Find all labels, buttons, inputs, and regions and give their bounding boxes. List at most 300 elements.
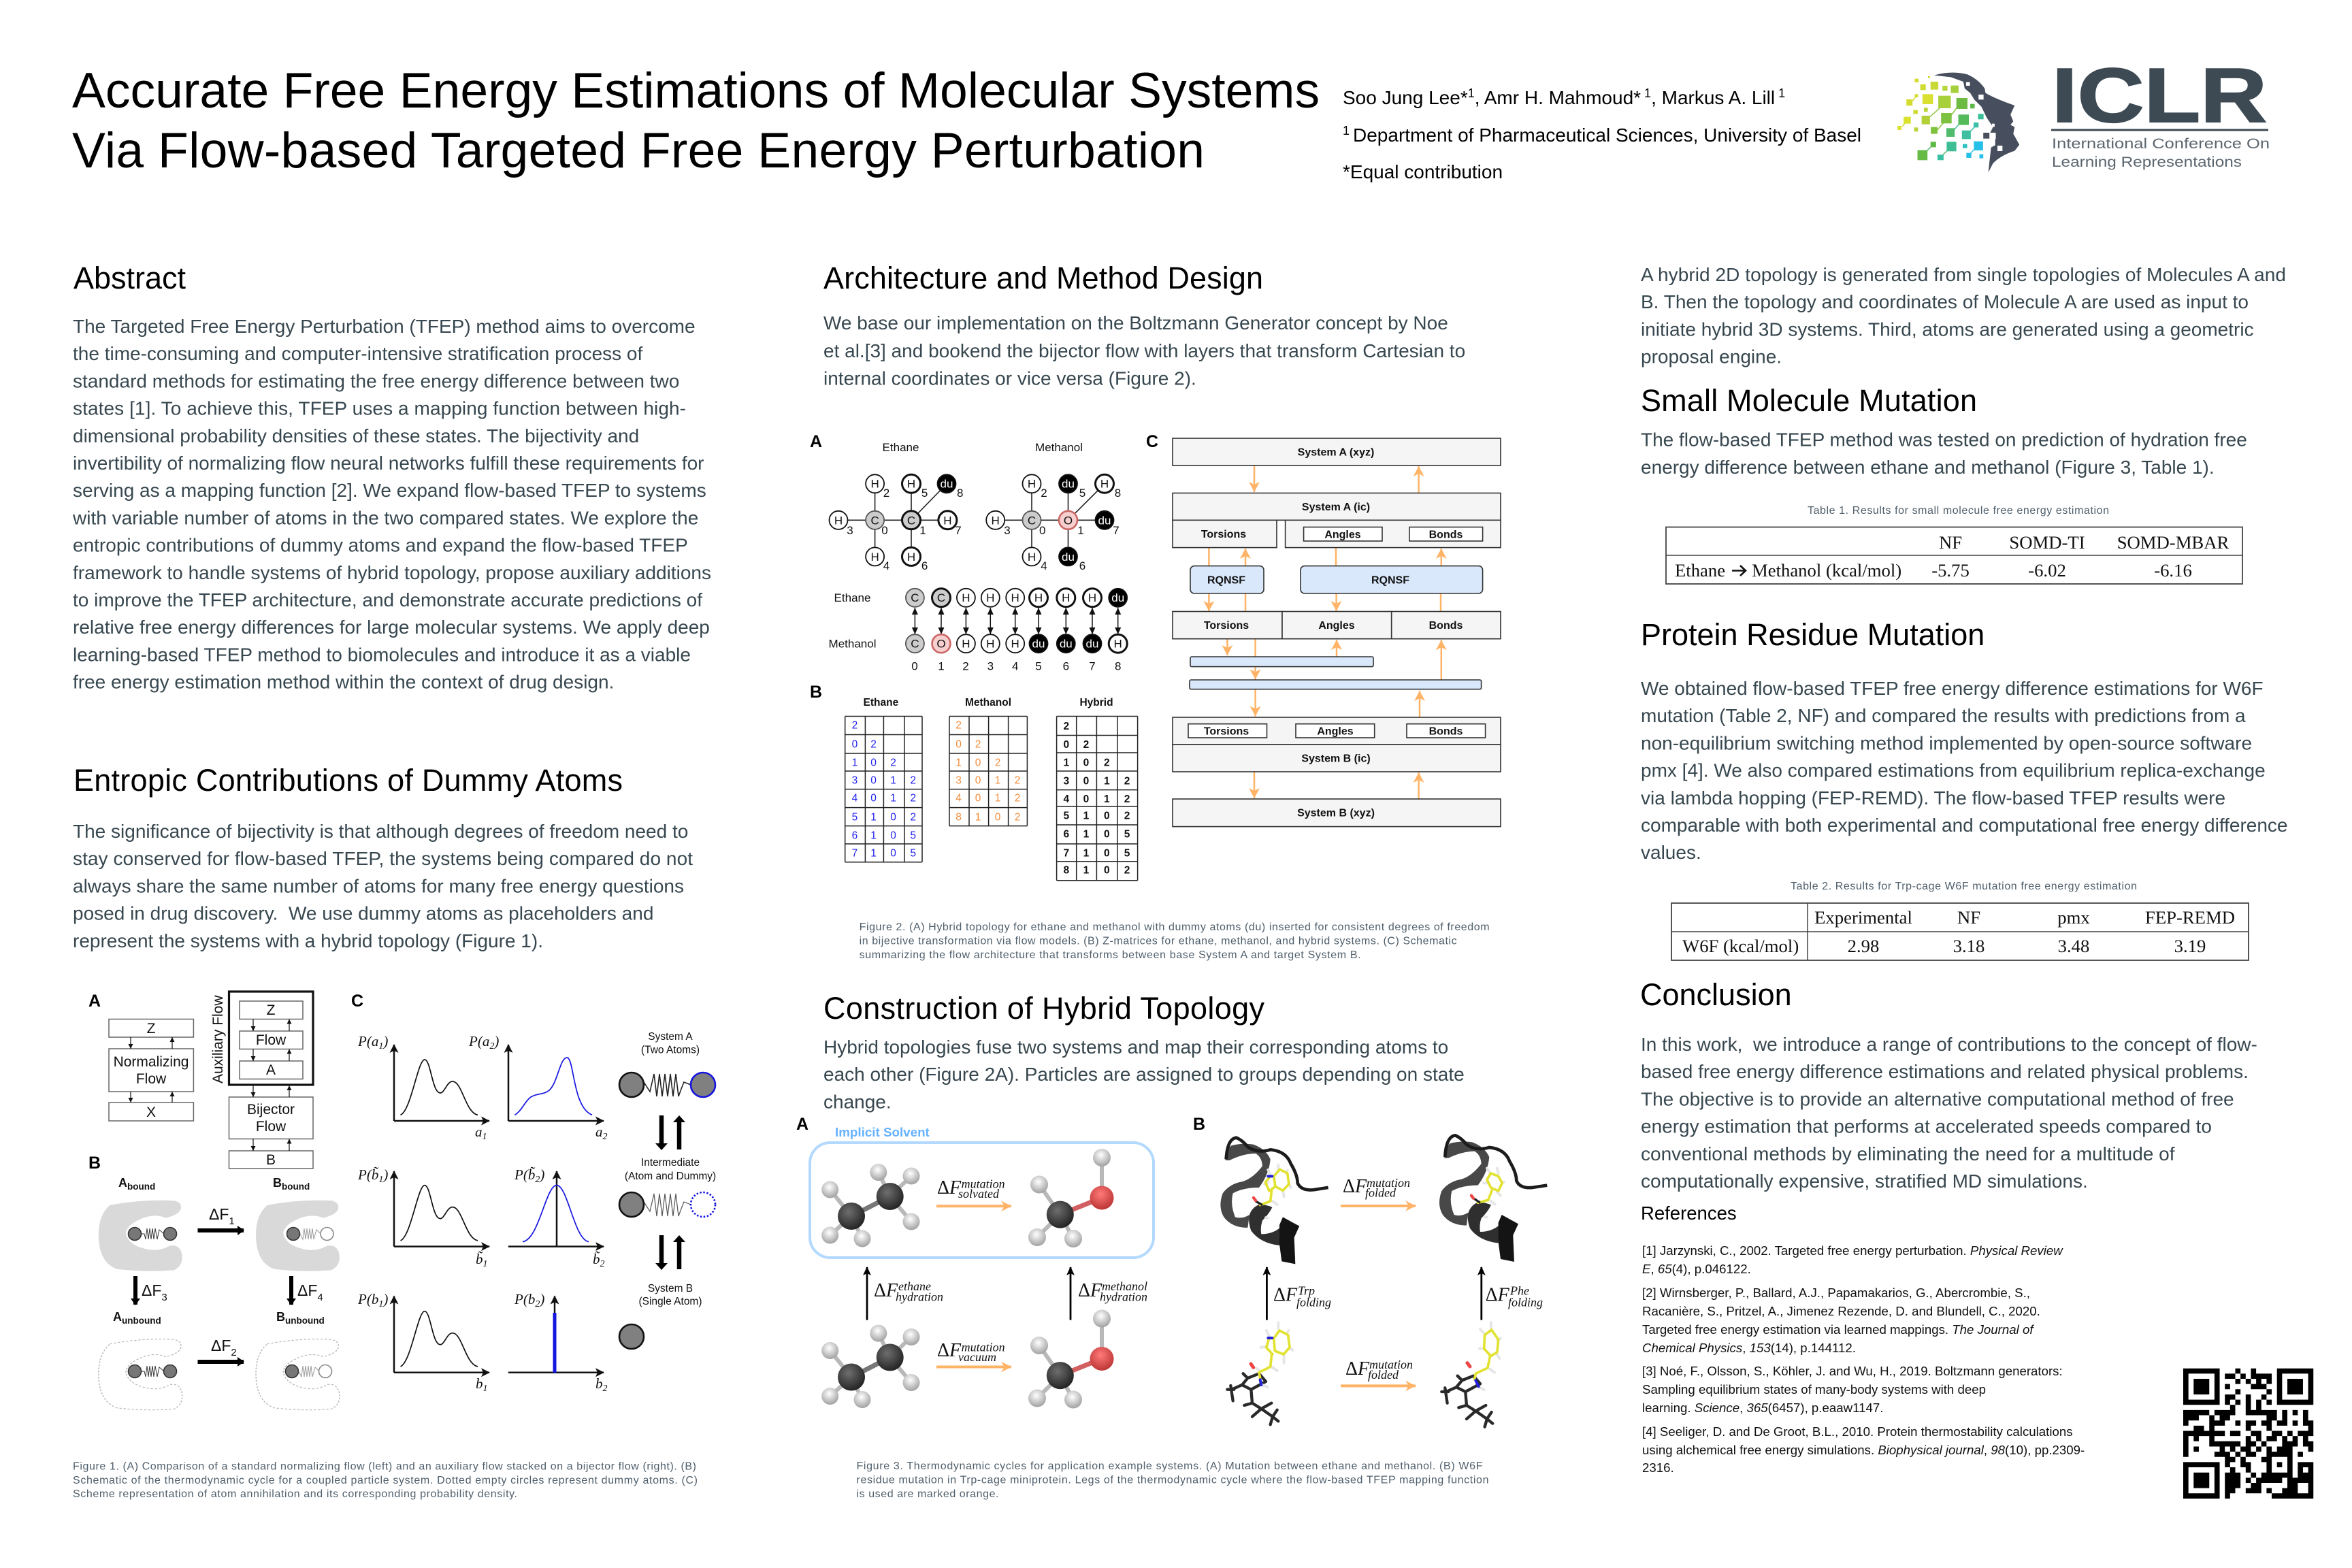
text block: protein residue body: comparable with both experimental and computational free energy difference: [1641, 815, 2288, 836]
free energy labels B: [1273, 1176, 1543, 1382]
authors and affiliations: , Amr H. Mahmoud*: [1475, 87, 1641, 108]
atom annihilation scheme: System B: [648, 1283, 693, 1294]
plot row b tilde: 1: [378, 1175, 383, 1185]
ethane molecule: H: [943, 514, 952, 527]
heading: abstract: Abstract: [74, 261, 186, 295]
free energy labels A: [874, 1177, 1147, 1364]
ethane z-matrix: 6105: [852, 830, 916, 841]
text block: small molecule body: energy difference between ethane and methanol (Figure 3, Table 1).: [1641, 457, 2215, 478]
free energy labels A: ΔF: [937, 1340, 962, 1361]
ethane molecule: H: [907, 551, 915, 564]
panel: small molecule mutation: [1641, 383, 2247, 584]
free energy labels B: ΔF: [1273, 1285, 1298, 1306]
particles unbound B: [286, 1365, 332, 1377]
figure 2: [810, 432, 1501, 961]
plot row b: ): [382, 1291, 388, 1307]
plot row a: 1: [378, 1041, 383, 1051]
text block: conclusion body: based free energy difference estimations and related physical problems.: [1641, 1061, 2249, 1082]
protein Phe folded: [1439, 1135, 1547, 1262]
atom annihilation scheme: Intermediate: [641, 1157, 700, 1169]
figure 1 panel A: flow stacks: A: [266, 1062, 276, 1078]
plot row b tilde: 2: [600, 1259, 604, 1269]
table 2: pmx: [2057, 907, 2090, 928]
figure 3 caption: residue mutation in Trp-cage miniprotein. Legs of the thermodynamic cycle where the flow-based TFEP mapping function: [856, 1474, 1489, 1486]
figure 2 panel B: z-matrices: Ethane: [864, 697, 899, 708]
text block: protein residue body: non-equilibrium switching method implemented by open-source software: [1641, 732, 2252, 753]
plot row b tilde: P(b̃: [358, 1166, 378, 1183]
RQNSF blocks: [1190, 566, 1483, 593]
text block: architecture body: internal coordinates or vice versa (Figure 2).: [823, 368, 1196, 389]
text block: reference list: Sampling equilibrium states of many-body systems with deep: [1642, 1382, 1986, 1396]
authors and affiliations: Soo Jung Lee*: [1343, 87, 1468, 108]
free energy labels B: ΔF: [1343, 1176, 1367, 1197]
ICLR wordmark: ICLR: [2052, 52, 2267, 138]
vacuum ethane: [821, 1325, 920, 1408]
figure 2 panel C: flow architecture: C: [1146, 432, 1158, 451]
methanol z-matrix: 102: [956, 757, 1000, 769]
split row: [1173, 611, 1501, 639]
methanol molecule: 1: [1077, 524, 1084, 537]
table 2: 3.18: [1953, 936, 1984, 956]
vacuum methanol: [1028, 1309, 1113, 1409]
methanol z-matrix: 2: [956, 720, 962, 731]
text block: protein residue body: pmx [4]. We also compared estimations from equilibrium replica-exchange: [1641, 760, 2266, 781]
unfolded Phe peptide: [1441, 1322, 1501, 1427]
table 1: Ethane: [1675, 560, 1725, 581]
plot row a: P(a: [358, 1033, 378, 1049]
panel: references: [1641, 1203, 2085, 1475]
plot row b tilde: ): [539, 1166, 544, 1183]
free energy labels B: mutation: [1367, 1176, 1410, 1190]
heading: protein residue mutation: Protein Residue Mutation: [1641, 617, 1984, 652]
text block: protein residue body: via lambda hopping (FEP-REMD). The flow-based TFEP results were: [1641, 787, 2225, 808]
system B boxes: Bonds: [1429, 725, 1463, 738]
plot row a: ): [493, 1033, 499, 1049]
table 1: (kcal/mol): [1826, 560, 1901, 581]
figure 1 panel B: thermodynamic cycle: unbound: [285, 1316, 325, 1326]
atom mapping row: H: [1011, 637, 1019, 651]
figure 1 panel A: flow stacks: Bijector: [247, 1102, 295, 1117]
hybrid z-matrix: [1057, 716, 1138, 881]
ethane molecule: 5: [921, 487, 928, 500]
ethane molecule: C: [907, 514, 915, 527]
icon: table arrow: [1732, 566, 1746, 576]
authors and affiliations: [1343, 86, 1861, 182]
system B boxes: System B (ic): [1301, 753, 1371, 765]
ethane molecule: H: [834, 514, 843, 527]
methanol molecule: 6: [1079, 559, 1085, 572]
text block: small molecule body: [1641, 429, 2247, 478]
protein Trp folded: [1220, 1138, 1328, 1264]
plot row b: 1: [378, 1299, 383, 1309]
authors and affiliations: *Equal contribution: [1343, 161, 1503, 182]
text block: architecture body: We base our implementation on the Boltzmann Generator concept by Noe: [823, 312, 1448, 333]
text block: hybrid 2D topology continued: B. Then the topology and coordinates of Molecule A are used as input to: [1641, 291, 2249, 312]
free energy labels A: ethane: [898, 1279, 931, 1293]
table 1: NF: [1939, 532, 1962, 553]
figure 3 panel B: W6F cycle: [1193, 1115, 1547, 1427]
text block: conclusion body: In this work, we introduce a range of contributions to the concept of flow-: [1641, 1034, 2257, 1055]
hybrid z-matrix: 3012: [1063, 776, 1130, 787]
plot row b: b: [476, 1375, 483, 1392]
plot row b tilde: 2: [535, 1175, 540, 1185]
atom mapping row: du: [1032, 637, 1045, 651]
system A boxes: System A (xyz): [1298, 446, 1374, 459]
figure 1 panel A: flow stacks: A: [88, 992, 101, 1011]
ethane molecule: H: [870, 478, 879, 490]
text block: conclusion body: computationally expensive, stratified MD simulations.: [1641, 1171, 2088, 1192]
figure 1 panel A: flow stacks: Auxiliary Flow: [210, 995, 226, 1083]
title: [72, 63, 1320, 178]
free energy labels B: folding: [1508, 1296, 1543, 1309]
text block: reference list: [2] Wirnsberger, P., Ballard, A.J., Papamakarios, G., Abercrombie, S.,: [1642, 1286, 2030, 1300]
free energy labels A: ΔF: [1078, 1280, 1102, 1301]
free energy labels A: ΔF: [874, 1280, 898, 1301]
methanol molecule: du: [1062, 478, 1075, 490]
text block: abstract body: invertibility of normalizing flow neural networks fulfill these requirements for: [73, 453, 704, 474]
atom mapping row: C: [937, 591, 945, 604]
text block: abstract body: the time-consuming and computer-intensive stratification process of: [73, 343, 642, 364]
table 1: SOMD-TI: [2009, 532, 2085, 553]
system B boxes: Torsions: [1204, 725, 1249, 738]
figure 2 panel A: hybrid topology: A: [810, 432, 822, 451]
atom annihilation scheme: (Single Atom): [638, 1296, 702, 1307]
figure 2 caption: [860, 921, 1490, 961]
heading: architecture: Architecture and Method Design: [823, 261, 1263, 295]
atom mapping row: 7: [1089, 660, 1096, 672]
system B boxes: System B (xyz): [1297, 807, 1375, 819]
text block: reference list: [1642, 1243, 2085, 1475]
figure 1 panel B: thermodynamic cycle: bound: [127, 1181, 155, 1192]
atom mapping row: 1: [938, 660, 945, 672]
panel: construction of hybrid topology: [823, 991, 1465, 1112]
text block: reference list: Targeted free energy estimation via learned mappings. The Journal of: [1642, 1322, 2034, 1337]
text block: hybrid 2D topology continued: A hybrid 2D topology is generated from single topologies of Molecules A and: [1641, 264, 2286, 285]
atom annihilation scheme: (Atom and Dummy): [625, 1171, 716, 1182]
table 2: NF: [1957, 907, 1980, 928]
text block: abstract body: relative free energy differences for large molecular systems. We apply deep: [73, 617, 710, 638]
text block: hybrid topology body: change.: [823, 1091, 892, 1112]
atom annihilation scheme: System A: [648, 1031, 693, 1043]
figure 3 caption: Figure 3. Thermodynamic cycles for application example systems. (A) Mutation between ethane and methanol. (B) W6F: [856, 1460, 1483, 1472]
methanol molecule: 8: [1115, 487, 1121, 500]
methanol z-matrix: 8102: [956, 811, 1020, 823]
text block: small molecule body: The flow-based TFEP method was tested on prediction of hydration free: [1641, 429, 2247, 451]
arrows A: [867, 1206, 1071, 1367]
ethane molecule: [829, 474, 963, 572]
figure 1 panel B: thermodynamic cycle: B: [88, 1154, 101, 1173]
blue bars: [1190, 657, 1482, 689]
text block: reference list: [4] Seeliger, D. and De Groot, B.L., 2010. Protein thermostability calculations: [1642, 1424, 2073, 1439]
authors and affiliations: 1: [1468, 86, 1475, 100]
figure 1 panel B: thermodynamic cycle: A: [118, 1176, 127, 1190]
solvated ethane: [821, 1164, 920, 1247]
text block: abstract body: serving as a mapping function [2]. We expand flow-based TFEP to systems: [73, 480, 706, 501]
figure 1 caption: Scheme representation of atom annihilation and its corresponding probability density.: [73, 1488, 517, 1500]
free energy labels B: ΔF: [1345, 1358, 1370, 1379]
ethane molecule: 1: [919, 524, 926, 537]
text block: abstract body: learning-based TFEP method to biomolecules and introduce it as a viable: [73, 644, 691, 665]
text block: conclusion body: [1641, 1034, 2257, 1192]
atom mapping row: du: [1111, 591, 1124, 604]
atom mapping row: H: [962, 591, 970, 604]
ethane z-matrix: 7105: [852, 848, 916, 859]
plot row b: [357, 1291, 607, 1394]
plot row b: P(b: [514, 1291, 535, 1307]
authors and affiliations: , Markus A. Lill: [1651, 87, 1775, 108]
system A boxes: Torsions: [1201, 529, 1246, 540]
unfolded Trp peptide: [1227, 1322, 1292, 1424]
figure 1 panel A: flow stacks: B: [266, 1152, 276, 1168]
figure 1 panel A: flow stacks: Normalizing: [114, 1054, 189, 1070]
table 2: 3.19: [2174, 936, 2206, 956]
figure 1 panel B: thermodynamic cycle: ΔF: [142, 1281, 161, 1299]
methanol molecule: 2: [1041, 487, 1047, 500]
methanol molecule: H: [992, 514, 1000, 527]
atom mapping row: H: [1034, 591, 1043, 604]
system A boxes: Bonds: [1429, 529, 1463, 540]
figure 3 caption: [856, 1460, 1489, 1500]
plot row a: a: [595, 1124, 603, 1140]
plot row b: 2: [535, 1299, 540, 1309]
figure 3 caption: is used are marked orange.: [856, 1488, 999, 1500]
authors and affiliations: 1: [1775, 86, 1785, 100]
free energy labels B: ΔF: [1486, 1285, 1510, 1306]
hybrid z-matrix: 6105: [1063, 829, 1130, 840]
ethane molecule: du: [941, 478, 953, 490]
plot row b tilde: 1: [483, 1259, 487, 1269]
figure 1 panel B: thermodynamic cycle: 4: [317, 1292, 323, 1303]
figure 3 panel A: ethane to methanol cycle: Implicit Solvent: [835, 1125, 930, 1139]
plot row a: 1: [482, 1132, 487, 1142]
figure 1 panel A: flow stacks: X: [146, 1105, 156, 1120]
atom mapping row: 3: [987, 660, 994, 672]
free energy labels A: solvated: [958, 1187, 1000, 1200]
plot row b tilde: [357, 1166, 604, 1269]
authors and affiliations: Department of Pharmaceutical Sciences, University of Basel: [1353, 125, 1861, 146]
text block: reference list: using alchemical free energy simulations. Biophysical journal, 98(10), pp.2309-: [1642, 1443, 2085, 1457]
text block: architecture body: et al.[3] and bookend the bijector flow with layers that transform Cartesian to: [823, 340, 1465, 361]
methanol molecule: du: [1062, 551, 1075, 564]
ethane molecule: H: [870, 551, 879, 564]
ethane molecule: H: [907, 478, 915, 490]
text block: abstract body: framework to handle systems of hybrid topology, propose auxiliary additions: [73, 562, 711, 583]
authors and affiliations: 1: [1641, 86, 1651, 100]
particles unbound A: [128, 1365, 177, 1377]
text block: protein residue body: mutation (Table 2, NF) and compared the results with predictions from a: [1641, 705, 2246, 726]
methanol molecule: 0: [1039, 524, 1045, 537]
text block: abstract body: states [1]. To achieve this, TFEP uses a mapping function between high-: [73, 398, 686, 419]
free energy labels B: folded: [1368, 1368, 1399, 1382]
figure 2 panel B: z-matrices: Methanol: [965, 697, 1011, 708]
text block: conclusion body: The objective is to provide an alternative computational method of free: [1641, 1088, 2234, 1109]
plot row b: b: [595, 1375, 603, 1392]
system A boxes: Angles: [1324, 529, 1361, 540]
atom mapping row: 8: [1115, 660, 1121, 672]
table 2: W6F (kcal/mol): [1682, 936, 1799, 956]
atom mapping row: H: [1062, 591, 1070, 604]
text block: abstract body: dimensional probability densities of these states. The bijectivity and: [73, 425, 639, 446]
split row: Bonds: [1429, 620, 1463, 632]
ICLR wordmark: [2051, 52, 2270, 170]
text block: abstract body: standard methods for estimating the free energy difference between two: [73, 370, 679, 391]
ethane z-matrix: 5102: [852, 811, 916, 823]
atom mapping row: H: [1088, 591, 1096, 604]
methanol molecule: 5: [1079, 487, 1085, 500]
atom mapping row: [829, 589, 1127, 672]
plot row a: P(a: [469, 1033, 489, 1049]
figure 1 panel A: flow stacks: Z: [147, 1021, 156, 1036]
table 1: SOMD-MBAR: [2117, 532, 2230, 553]
hybrid z-matrix: 7105: [1063, 848, 1130, 859]
text block: hybrid 2D topology continued: initiate hybrid 3D systems. Third, atoms are generated using a geometric: [1641, 318, 2254, 340]
text block: protein residue body: [1641, 678, 2288, 863]
text block: reference list: [1] Jarzynski, C., 2002. Targeted free energy perturbation. Physical Review: [1642, 1243, 2063, 1258]
text block: entropic body: The significance of bijectivity is that although degrees of freedom need to: [73, 821, 688, 842]
heading: small molecule mutation: Small Molecule Mutation: [1641, 383, 1977, 418]
figure 1 panel B: thermodynamic cycle: 2: [231, 1347, 237, 1358]
methanol molecule: C: [1028, 514, 1036, 527]
text block: abstract body: entropic contributions of dummy atoms and expand the flow-based TFEP: [73, 535, 688, 556]
figure 3 panel A: ethane to methanol cycle: A: [796, 1115, 808, 1134]
ethane z-matrix: [845, 716, 922, 862]
figure 2 caption: Figure 2. (A) Hybrid topology for ethane and methanol with dummy atoms (du) inserted for consistent degrees of freedom: [860, 921, 1490, 933]
atom mapping row: 5: [1035, 660, 1042, 672]
figure 2 caption: summarizing the flow architecture that transforms between base System A and target System B.: [860, 949, 1361, 961]
atom mapping row: 0: [911, 660, 918, 672]
figure 1 panel C: probability density plots: [351, 992, 716, 1394]
figure 1 panel B: thermodynamic cycle: A: [113, 1310, 122, 1324]
table 1: -6.16: [2154, 560, 2192, 581]
figure 3: [796, 1115, 1547, 1500]
methanol z-matrix: 3012: [956, 774, 1020, 787]
plot row a: a: [475, 1124, 482, 1140]
free energy labels B: mutation: [1369, 1358, 1413, 1371]
free energy labels A: hydration: [896, 1290, 943, 1304]
free energy labels A: methanol: [1102, 1279, 1147, 1293]
text block: hybrid topology body: each other (Figure 2A). Particles are assigned to groups depending on state: [823, 1064, 1465, 1085]
system B boxes: [1173, 717, 1501, 827]
ethane molecule: 2: [883, 487, 889, 500]
methanol molecule: 4: [1041, 559, 1047, 572]
ethane molecule: 4: [883, 559, 889, 572]
figure 1 panel B: thermodynamic cycle: ΔF: [297, 1281, 317, 1299]
atom mapping row: 6: [1063, 660, 1069, 672]
methanol molecule: 7: [1113, 524, 1120, 537]
atom mapping row: Ethane: [834, 591, 870, 604]
figure 1 panel A: flow stacks: Flow: [136, 1071, 167, 1087]
figure 1 panel B: thermodynamic cycle: bound: [282, 1181, 310, 1192]
atom mapping row: H: [986, 591, 994, 604]
ethane z-matrix: 3012: [852, 774, 916, 787]
text block: conclusion body: energy estimation that performs at accelerated speeds compared to: [1641, 1116, 2212, 1137]
methanol molecule: H: [1028, 478, 1036, 490]
RQNSF blocks: RQNSF: [1371, 574, 1409, 587]
figure 2 panel A: hybrid topology: [810, 432, 1127, 672]
figure 1 panel B: thermodynamic cycle: 1: [229, 1215, 235, 1227]
figure 3 panel A: ethane to methanol cycle: [796, 1115, 1154, 1409]
plot row b tilde: ): [382, 1166, 388, 1183]
atom mapping row: H: [1011, 591, 1019, 604]
figure 1 panel B: thermodynamic cycle: ΔF: [211, 1337, 231, 1354]
atom mapping row: H: [962, 637, 970, 651]
ethane molecule: 0: [881, 524, 888, 537]
hybrid z-matrix: 102: [1063, 757, 1110, 769]
figure 1 panel B: thermodynamic cycle: B: [276, 1310, 285, 1324]
text block: entropic body: always share the same number of atoms for many free energy questions: [73, 875, 684, 896]
plot row a: [357, 1033, 607, 1142]
table 2: [1671, 903, 2249, 960]
orange flow arrows: [1209, 466, 1441, 799]
plot row b: 2: [603, 1384, 607, 1394]
solvated methanol: [1028, 1149, 1113, 1247]
ethane molecule: 7: [955, 524, 962, 537]
panel: entropic contributions: [73, 763, 693, 951]
text block: reference list: Chemical Physics, 153(14), p.144112.: [1642, 1341, 1856, 1355]
figure 1 panel C: probability density plots: C: [351, 992, 363, 1011]
methanol z-matrix: 02: [956, 739, 981, 750]
atom mapping row: 2: [962, 660, 969, 672]
atom mapping row: H: [1114, 637, 1122, 651]
figure 2 caption: in bijective transformation via flow models. (B) Z-matrices for ethane, methanol, and hybrid systems. (C) Schematic: [860, 935, 1457, 947]
methanol molecule: H: [1028, 551, 1036, 564]
figure 1 caption: Schematic of the thermodynamic cycle for a coupled particle system. Dotted empty circles represent dummy atoms. (C): [73, 1475, 698, 1486]
figure 3 panel B: W6F cycle: B: [1193, 1115, 1205, 1134]
atom annihilation scheme: (Two Atoms): [641, 1044, 700, 1056]
table 1: -5.75: [1931, 560, 1970, 581]
free energy labels A: mutation: [962, 1341, 1005, 1354]
table 2: 2.98: [1848, 936, 1879, 956]
free energy labels A: hydration: [1100, 1290, 1147, 1304]
text block: entropic body: stay conserved for flow-based TFEP, the systems being compared do not: [73, 848, 693, 869]
figure 2 panel B: z-matrices: [810, 683, 1138, 881]
text block: entropic body: represent the systems with a hybrid topology (Figure 1).: [73, 930, 543, 951]
panel: protein residue mutation: [1641, 617, 2288, 960]
free energy labels A: ΔF: [937, 1177, 962, 1198]
atom mapping row: C: [911, 591, 919, 604]
hybrid z-matrix: 4012: [1063, 794, 1130, 805]
plot row a: 2: [603, 1132, 607, 1142]
methanol z-matrix: 4012: [956, 792, 1020, 804]
free energy labels B: Trp: [1298, 1284, 1315, 1297]
text block: conclusion body: conventional methods by eliminating the need for a multitude of: [1641, 1143, 2175, 1164]
free energy labels A: vacuum: [958, 1350, 996, 1364]
free energy labels B: folded: [1365, 1186, 1396, 1199]
atom mapping row: 4: [1012, 660, 1018, 672]
figure 1 panel B: thermodynamic cycle: [88, 1154, 340, 1410]
system B boxes: Angles: [1317, 725, 1354, 738]
particles bound A: [128, 1228, 177, 1240]
ethane molecule: 3: [847, 524, 853, 537]
particles bound B: [287, 1228, 333, 1240]
text block: reference list: learning. Science, 365(6457), p.eaaw1147.: [1642, 1401, 1883, 1415]
ethane molecule: 8: [957, 487, 963, 500]
methanol molecule: H: [1100, 478, 1109, 490]
ethane z-matrix: 2: [852, 720, 858, 731]
text block: abstract body: free energy estimation method within the context of drug design.: [73, 672, 614, 693]
figure 1 panel B: thermodynamic cycle: unbound: [122, 1316, 161, 1326]
arrows B: [1267, 1206, 1482, 1386]
split row: Torsions: [1204, 620, 1249, 632]
atom mapping row: H: [986, 637, 994, 651]
ethane z-matrix: 102: [852, 757, 896, 769]
figure 1 panel A: flow stacks: [88, 992, 313, 1169]
free energy labels A: mutation: [962, 1177, 1005, 1191]
panel: architecture and method design: [823, 261, 1465, 389]
text block: reference list: 2316.: [1642, 1460, 1674, 1475]
figure 1 panel A: flow stacks: Flow: [256, 1032, 287, 1048]
authors and affiliations: 1: [1343, 124, 1353, 137]
